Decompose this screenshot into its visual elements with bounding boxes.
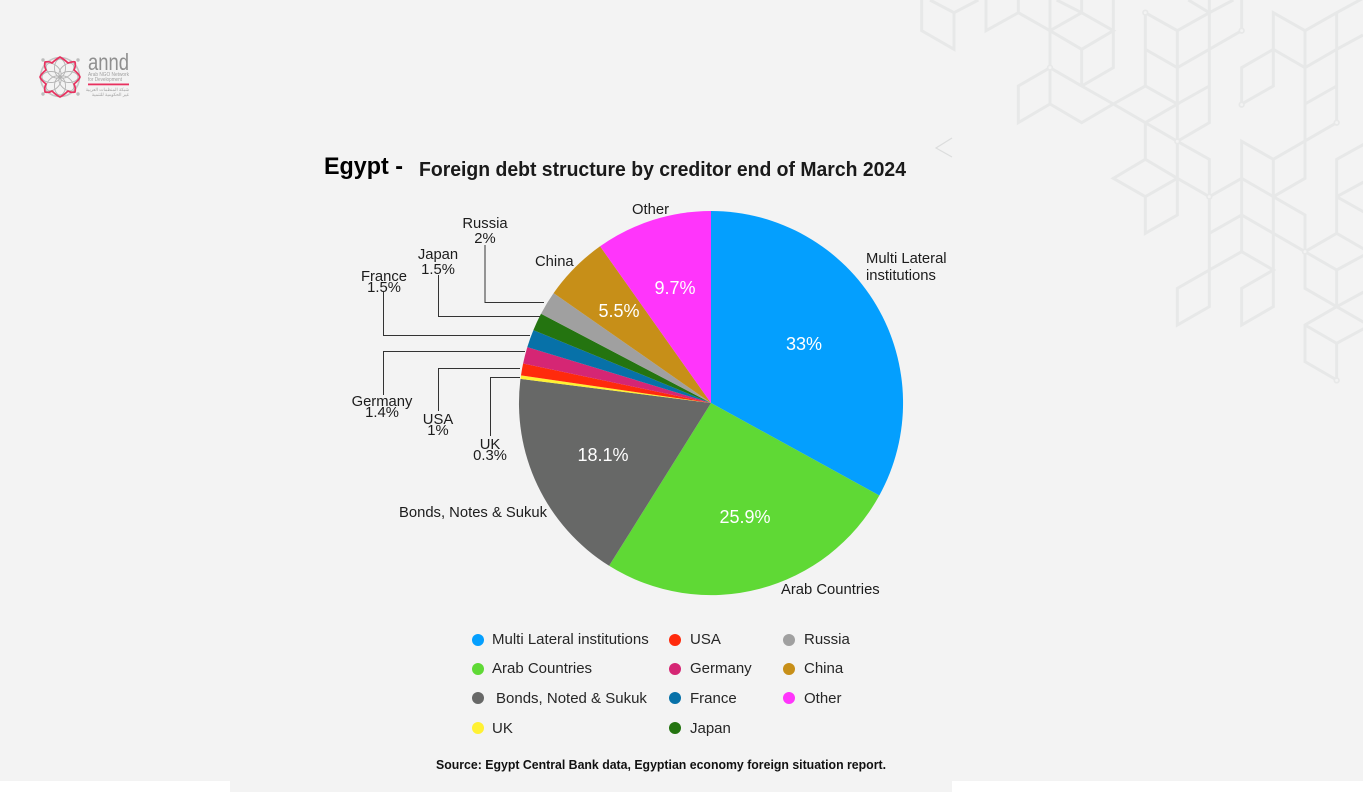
- slice labels: Germany: [352, 394, 413, 410]
- slice labels: Other: [632, 202, 669, 218]
- slice values: 9.7%: [654, 278, 696, 298]
- heading: chart title: Foreign debt structure by creditor end of March 2024: [419, 159, 907, 181]
- logo: annd: غير الحكومية للتنمية: [92, 92, 130, 98]
- slice labels: 1.4%: [365, 405, 399, 421]
- slice labels: 1.5%: [421, 262, 455, 278]
- legend: USA: [690, 631, 721, 648]
- legend: Russia: [804, 631, 851, 648]
- legend: [472, 631, 851, 737]
- slice labels: Japan: [418, 247, 458, 263]
- logo: annd: Arab NGO Network: [88, 72, 129, 78]
- slice values: 5.5%: [598, 301, 640, 321]
- heading: Egypt: Egypt -: [324, 153, 403, 180]
- logo: annd: شبكة المنظمات العربية: [86, 87, 129, 93]
- slice labels: institutions: [866, 268, 936, 284]
- slice labels: USA: [423, 412, 453, 428]
- logo: annd: [40, 49, 130, 98]
- legend: Japan: [690, 720, 731, 737]
- slice labels: [352, 202, 947, 598]
- slice values: 18.1%: [577, 445, 629, 465]
- legend: France: [690, 690, 737, 707]
- slice labels: 0.3%: [473, 448, 507, 464]
- logo: annd: for Development: [88, 77, 123, 83]
- slice labels: UK: [480, 437, 500, 453]
- slice labels: 1%: [427, 423, 449, 439]
- slice labels: China: [535, 254, 574, 270]
- pie chart: [519, 211, 903, 595]
- legend: Multi Lateral institutions: [492, 631, 649, 648]
- logo: annd: annd: [88, 49, 129, 75]
- slice values: 33%: [786, 334, 822, 354]
- legend: UK: [492, 720, 513, 737]
- slice values: 25.9%: [719, 507, 771, 527]
- source note: Source: Egypt Central Bank data, Egyptian economy foreign situation report.: [436, 758, 886, 772]
- legend: China: [804, 660, 844, 677]
- slice labels: France: [361, 269, 407, 285]
- slice labels: Multi Lateral: [866, 251, 947, 267]
- legend: Bonds, Noted & Sukuk: [496, 690, 647, 707]
- slice labels: Bonds, Notes & Sukuk: [399, 505, 548, 521]
- slice labels: Arab Countries: [781, 582, 880, 598]
- slice values: [577, 278, 822, 527]
- slice labels: 2%: [474, 231, 496, 247]
- icon: chevron arrow: [936, 138, 952, 157]
- legend: Germany: [690, 660, 752, 677]
- legend: Other: [804, 690, 842, 707]
- leader lines: [384, 245, 544, 436]
- slice labels: 1.5%: [367, 280, 401, 296]
- slice labels: Russia: [462, 216, 508, 232]
- background geometric cube pattern: [922, 0, 1363, 383]
- legend: Arab Countries: [492, 660, 592, 677]
